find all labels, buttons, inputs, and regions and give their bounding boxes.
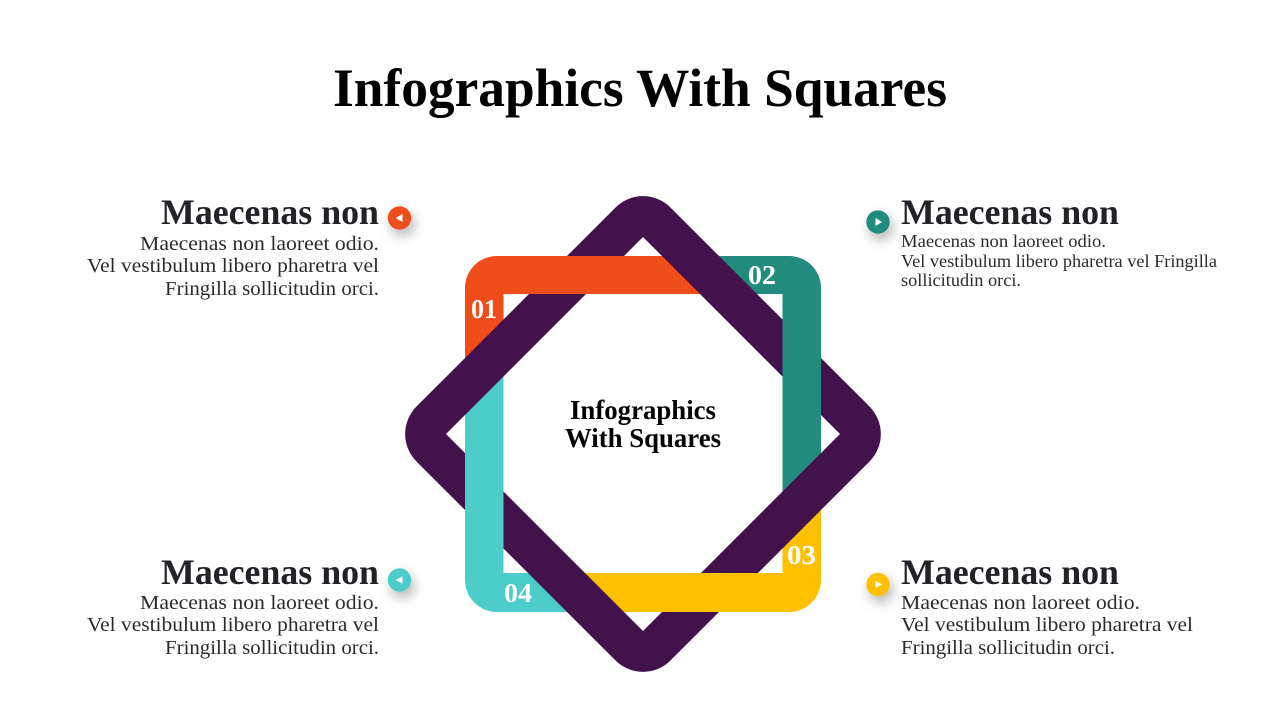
text 4: Fringilla sollicitudin orci. bbox=[165, 637, 379, 659]
text 1: Fringilla sollicitudin orci. bbox=[165, 278, 379, 300]
text 2: sollicitudin orci. bbox=[901, 270, 1021, 290]
text 4 bbox=[87, 592, 379, 659]
central diagram bbox=[405, 196, 881, 672]
text 3: Vel vestibulum libero pharetra vel bbox=[901, 614, 1193, 636]
purple diamond frame bbox=[405, 196, 881, 672]
icon: teal right arrow bbox=[866, 210, 890, 234]
text 3: Maecenas non laoreet odio. bbox=[901, 592, 1140, 614]
text 2 bbox=[901, 231, 1217, 290]
number 03: 03 bbox=[787, 540, 816, 570]
heading 3: Maecenas non bbox=[901, 552, 1119, 592]
text 2: Maecenas non laoreet odio. bbox=[901, 231, 1106, 251]
title: Infographics With Squares bbox=[333, 58, 947, 118]
icon: cyan left arrow bbox=[388, 568, 411, 592]
icon: orange left arrow bbox=[388, 206, 411, 230]
text 1 bbox=[87, 233, 379, 300]
text 3: Fringilla sollicitudin orci. bbox=[901, 637, 1115, 659]
segment 01 orange bbox=[465, 256, 700, 358]
number 04: 04 bbox=[504, 578, 532, 608]
text 1: Maecenas non laoreet odio. bbox=[140, 233, 379, 255]
block 4: bottom left bbox=[87, 552, 411, 659]
block 1: top left bbox=[87, 192, 411, 300]
number 02: 02 bbox=[748, 260, 776, 290]
center label: With Squares bbox=[565, 423, 721, 453]
text 3 bbox=[901, 592, 1193, 659]
text 4: Vel vestibulum libero pharetra vel bbox=[87, 614, 379, 636]
text 4: Maecenas non laoreet odio. bbox=[140, 592, 379, 614]
text 1: Vel vestibulum libero pharetra vel bbox=[87, 255, 379, 277]
segment 02 teal bbox=[719, 256, 821, 492]
heading 1: Maecenas non bbox=[161, 192, 379, 232]
text 2: Vel vestibulum libero pharetra vel Fringilla bbox=[901, 251, 1217, 271]
block 2: top right bbox=[866, 192, 1217, 290]
heading 2: Maecenas non bbox=[901, 192, 1119, 232]
number 01: 01 bbox=[471, 294, 497, 324]
block 3: bottom right bbox=[866, 552, 1193, 659]
segment 04 cyan bbox=[465, 376, 567, 612]
purple crossings over the square bbox=[465, 256, 821, 612]
center label: Infographics bbox=[570, 395, 716, 425]
segment 03 yellow bbox=[585, 510, 821, 612]
icon: yellow right arrow bbox=[866, 573, 890, 596]
heading 4: Maecenas non bbox=[161, 552, 379, 592]
center label bbox=[565, 395, 721, 453]
